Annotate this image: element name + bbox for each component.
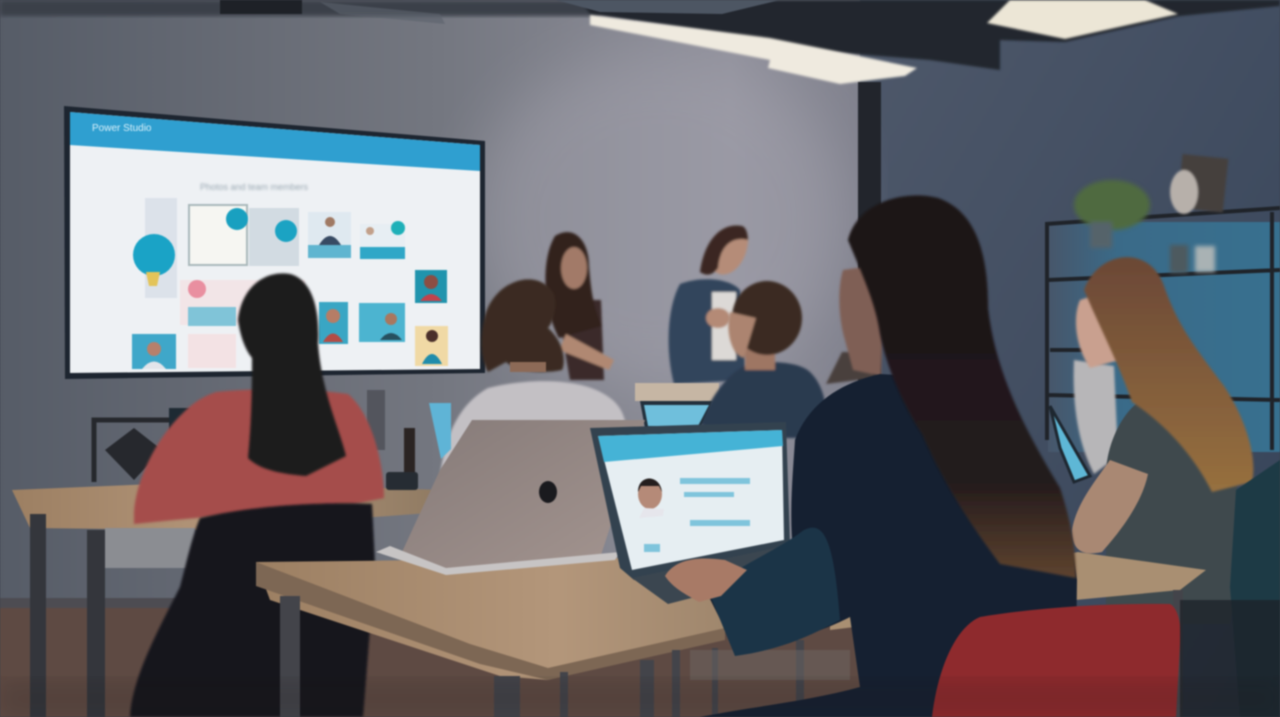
screen pink block — [180, 280, 305, 325]
screen portrait 3 — [415, 270, 447, 303]
front laptop — [590, 422, 800, 604]
person: student in red — [130, 273, 384, 717]
screen header — [70, 112, 480, 171]
screen title: Photos and team members — [200, 182, 309, 192]
presenter left — [545, 232, 614, 380]
screen cyan circle — [133, 234, 175, 276]
back laptop — [429, 403, 451, 459]
screen portrait 5 — [359, 303, 405, 342]
background: right wall — [860, 0, 1280, 717]
silver laptop — [376, 420, 645, 575]
person: man at back — [700, 281, 826, 438]
right laptop — [1050, 406, 1090, 482]
wall socket panel — [105, 528, 195, 568]
person far right of man — [826, 352, 874, 384]
sweater sleeve — [708, 528, 840, 656]
screen white card — [189, 205, 247, 265]
mask/hair fall — [1074, 360, 1118, 474]
text lines — [644, 478, 750, 552]
right part of front table — [830, 552, 1206, 630]
presenter right — [669, 225, 748, 384]
laptop base — [376, 546, 620, 575]
shelf plant — [1074, 180, 1150, 248]
arm — [1072, 460, 1148, 553]
screen pink dot — [188, 280, 206, 298]
ceiling light strip — [590, 15, 917, 84]
red top — [134, 389, 384, 524]
screen third dot — [391, 221, 405, 235]
wall item — [367, 390, 385, 450]
ceiling — [0, 0, 1280, 70]
teal chair — [1230, 460, 1280, 717]
hair bun — [481, 279, 564, 372]
screen card dot — [226, 208, 248, 230]
torso — [700, 374, 1077, 717]
lid — [590, 422, 790, 580]
right lower shadow — [1180, 600, 1280, 717]
background: left wall — [0, 0, 860, 610]
screen second dot — [275, 220, 297, 242]
left bottom shadow — [0, 680, 1280, 717]
hair — [1084, 257, 1253, 492]
face — [839, 264, 885, 376]
floor items under table — [690, 650, 850, 680]
screen header label: Power Studio — [92, 123, 152, 134]
portrait — [638, 478, 664, 518]
wall corner column — [858, 82, 881, 382]
hair — [238, 273, 346, 476]
shelf vase and picture — [1170, 154, 1228, 214]
apple logo — [539, 481, 557, 503]
shelf cups — [1170, 245, 1215, 273]
display header — [598, 430, 783, 462]
screen faint block — [188, 334, 236, 368]
white shirt — [438, 381, 626, 506]
back table — [12, 482, 442, 717]
shelf unit — [1046, 154, 1280, 452]
screen portrait 1 — [308, 212, 351, 258]
table legs — [280, 590, 1183, 717]
shelf blue back — [1048, 222, 1280, 452]
screen portrait 2 — [360, 224, 405, 259]
hand — [665, 559, 747, 602]
screen frame — [64, 106, 485, 379]
desk bottle — [386, 428, 418, 490]
screen blue bar — [188, 307, 236, 326]
screen portrait 6 — [132, 334, 176, 369]
neck — [510, 362, 546, 372]
display — [598, 430, 784, 570]
screen portrait 4 — [319, 302, 348, 344]
dark diamond on frame — [105, 428, 162, 480]
background: skirting — [0, 598, 180, 608]
background: wall light glow — [470, 50, 850, 390]
red chair — [932, 604, 1181, 717]
background: floor — [0, 605, 860, 717]
small lectern behind — [635, 383, 719, 401]
gray shirt — [1106, 394, 1240, 624]
screen gray panel — [249, 208, 299, 266]
table edge — [256, 562, 725, 680]
chair frame behind left — [94, 420, 172, 482]
small laptop behind — [169, 408, 193, 438]
wall screen — [64, 106, 485, 379]
black jacket on chair — [130, 503, 375, 717]
person: student in white — [438, 279, 626, 506]
person: right student — [1050, 257, 1280, 717]
laptop lid — [402, 420, 645, 574]
screen body — [70, 112, 480, 373]
screen lavender panel — [145, 198, 177, 298]
keyboard base — [632, 545, 800, 604]
person: foreground woman — [665, 195, 1077, 717]
screen yellow figure — [146, 272, 160, 286]
front table — [256, 558, 860, 680]
shelf frame — [1046, 208, 1280, 450]
face — [1076, 290, 1120, 368]
ceiling light panel — [987, 0, 1178, 39]
back laptop screen — [640, 401, 712, 428]
screen portrait 7 — [415, 326, 448, 366]
long hair — [848, 195, 1076, 578]
